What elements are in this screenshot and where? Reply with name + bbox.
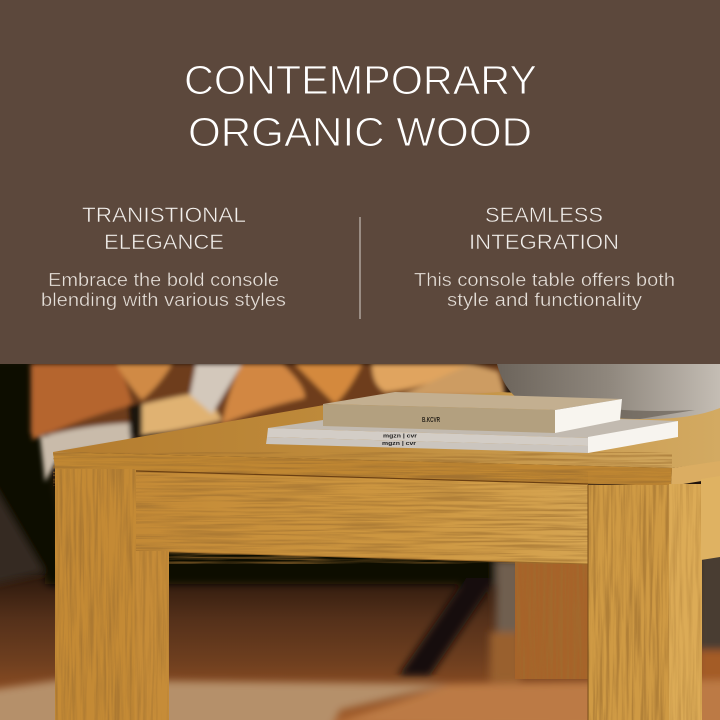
magazine spine labels: mgzn | cvr: [382, 441, 416, 447]
left description: blending with various styles: [41, 290, 286, 310]
right column: seamless integration: [414, 203, 675, 310]
title: CONTEMPORARY: [184, 57, 537, 103]
table front right leg: [588, 476, 720, 720]
right description: This console table offers both: [414, 270, 675, 290]
left column: transitional elegance: [41, 203, 286, 310]
book spine label: B.KCVR: [422, 417, 440, 424]
title: ORGANIC WOOD: [188, 109, 532, 155]
right heading: INTEGRATION: [469, 230, 619, 254]
magazine spine labels: [382, 434, 417, 447]
table back leg: [515, 560, 588, 679]
magazine spine labels: mgzn | cvr: [383, 434, 417, 440]
panel: table photo: [0, 360, 720, 720]
table top surface: [53, 392, 720, 468]
right description: style and functionality: [447, 290, 642, 310]
title: [184, 57, 537, 155]
blurred room background: [0, 360, 720, 720]
table front left leg: [55, 469, 169, 720]
left heading: TRANISTIONAL: [82, 203, 246, 227]
panel: brown text panel: [0, 0, 720, 364]
firewood logs: [30, 364, 505, 482]
stone bowl: [497, 364, 720, 419]
table top front edge: [53, 452, 720, 486]
right description: [414, 270, 675, 310]
left description: Embrace the bold console: [48, 270, 279, 290]
left heading: [82, 203, 246, 254]
right heading: [469, 203, 619, 254]
table apron: [136, 471, 588, 564]
right heading: SEAMLESS: [485, 203, 603, 227]
stack of magazines: [266, 419, 678, 453]
left heading: ELEGANCE: [104, 230, 224, 254]
top book: [323, 392, 622, 433]
left description: [41, 270, 286, 310]
